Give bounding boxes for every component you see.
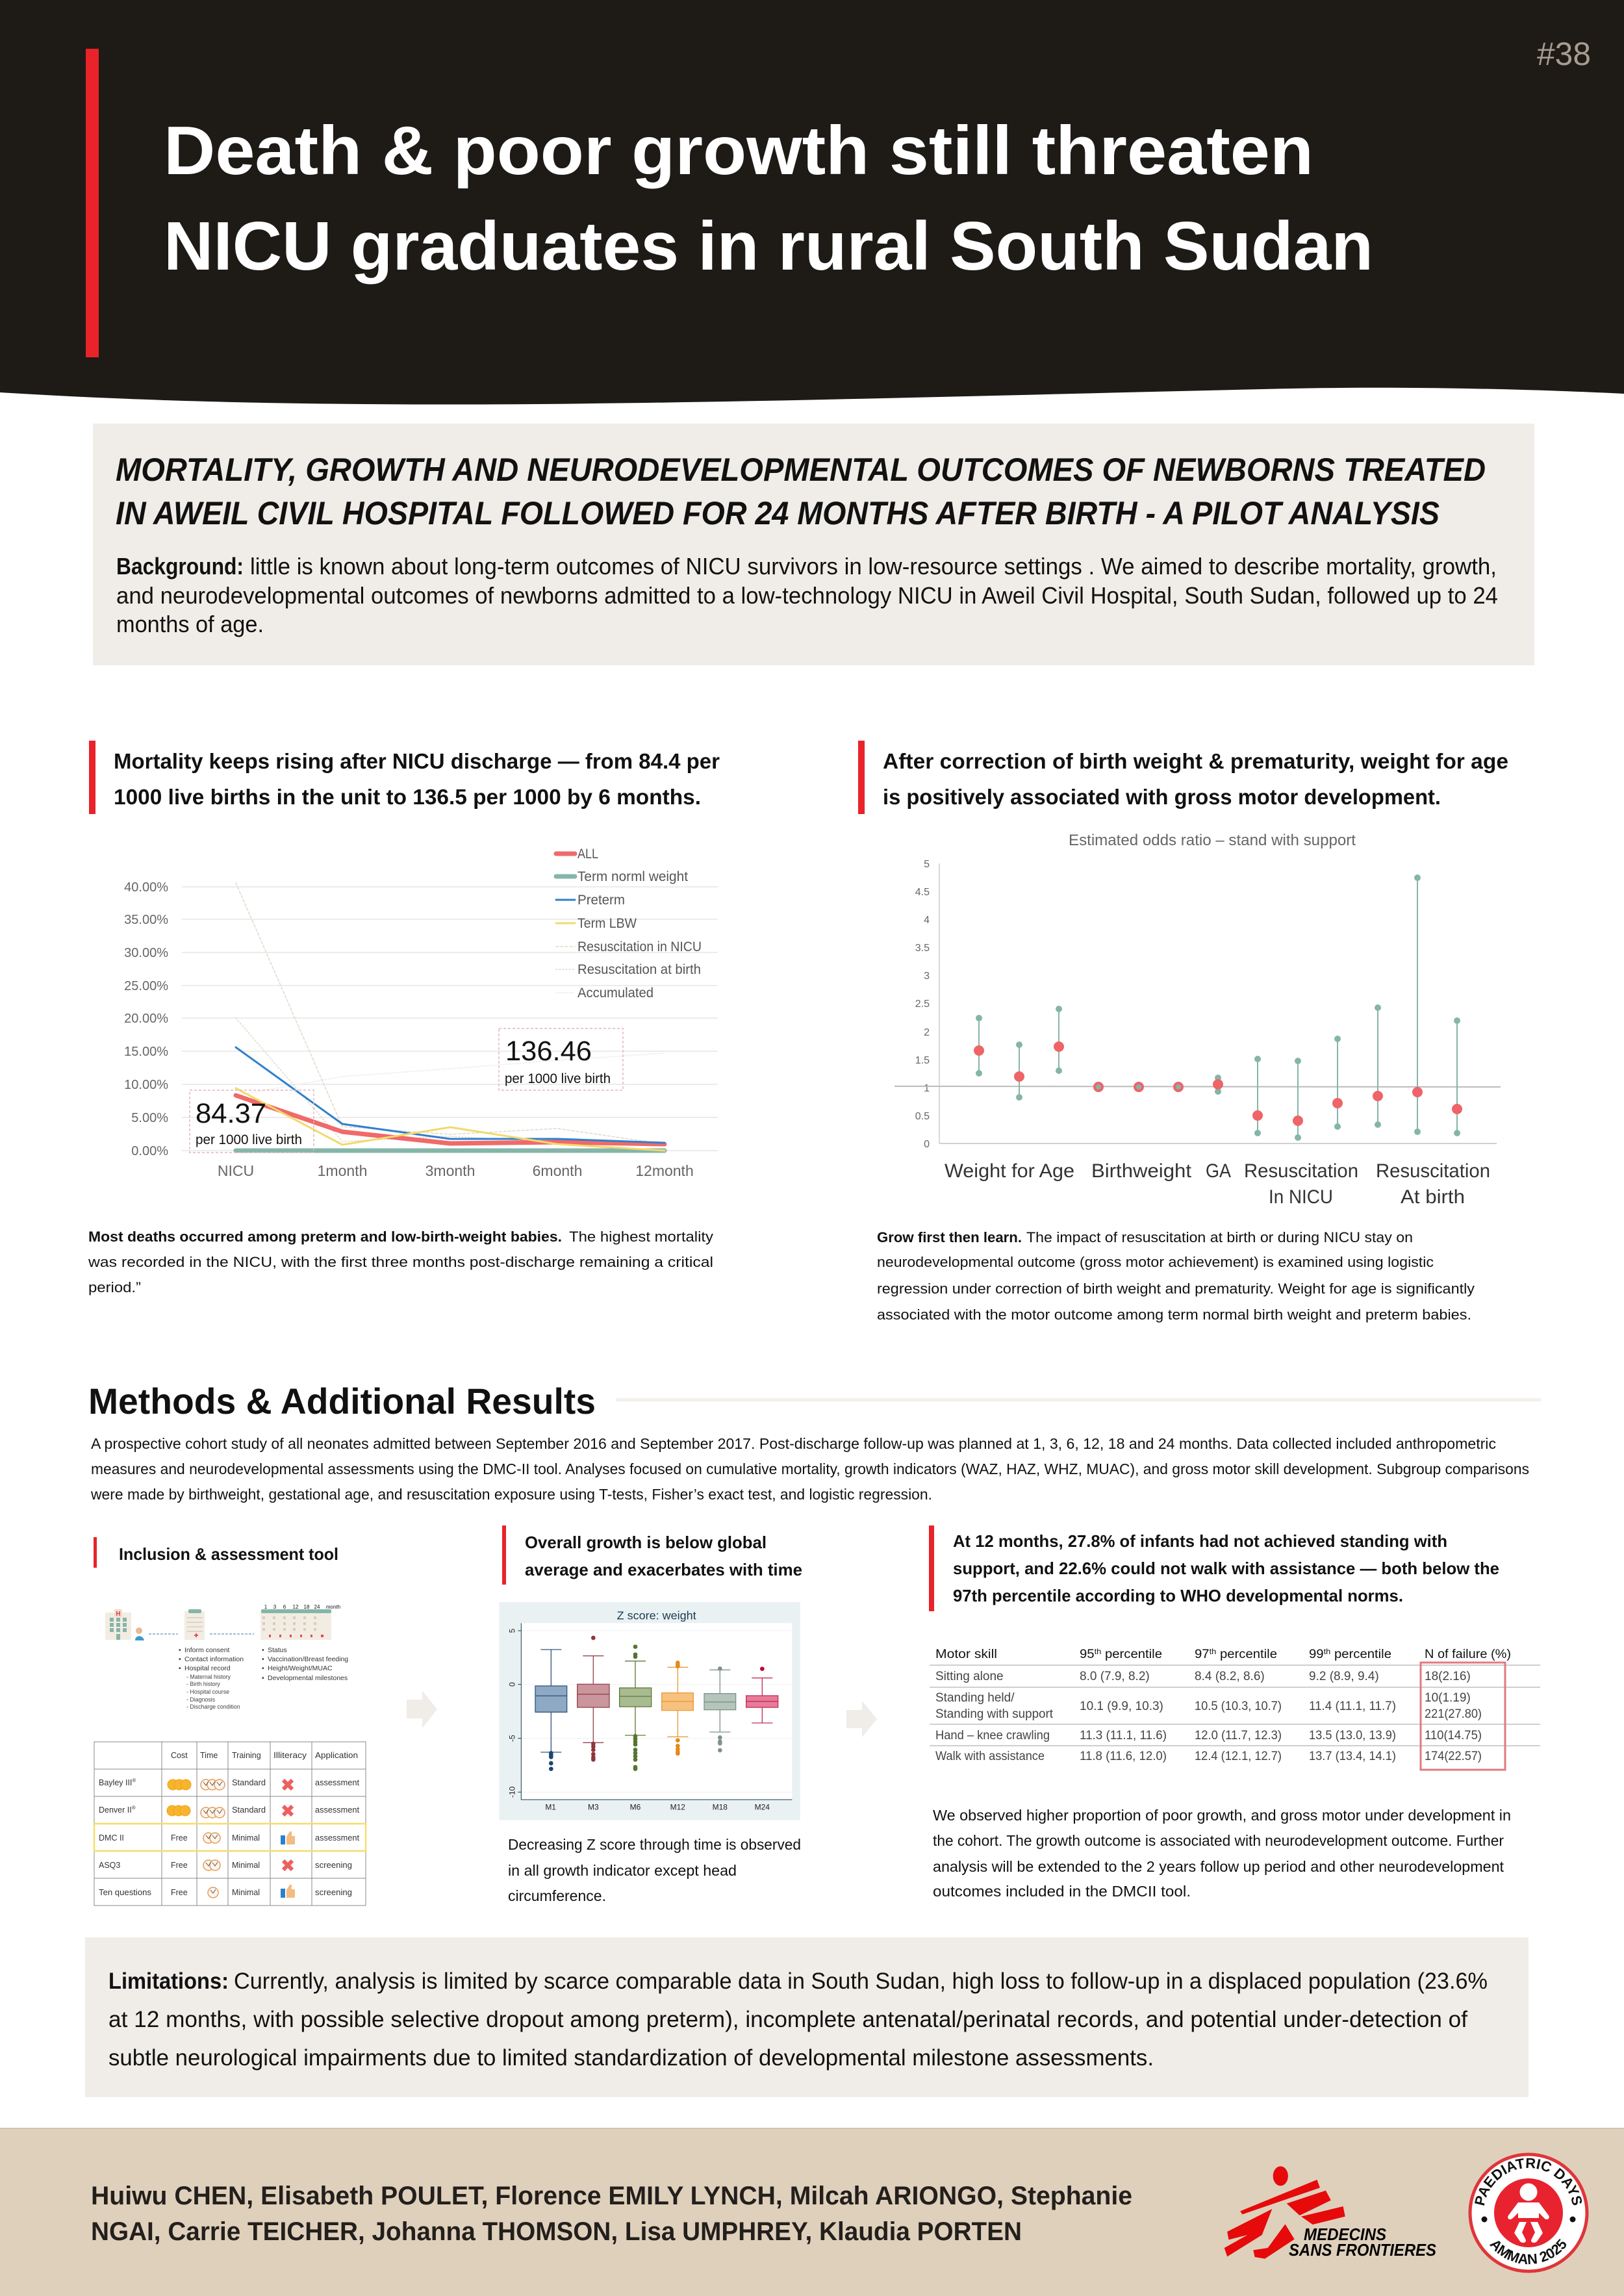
list: follow-up data: Vaccination/Breast feeding bbox=[268, 1655, 348, 1663]
box: M12 bbox=[662, 1661, 693, 1755]
footer band bbox=[0, 2128, 1624, 2296]
chart: estimated odds ratio: 1 bbox=[924, 1083, 930, 1094]
list: enrolment data: - Discharge condition bbox=[186, 1703, 240, 1710]
list: follow-up data: Developmental milestones bbox=[268, 1674, 348, 1682]
study title: IN AWEIL CIVIL HOSPITAL FOLLOWED FOR 24 MONTHS AFTER BIRTH - A PILOT ANALYSIS bbox=[116, 495, 1440, 531]
table: motor skill percentiles: Standing with support bbox=[935, 1707, 1054, 1721]
table: motor skill percentiles: percentile bbox=[1330, 1648, 1391, 1661]
table: motor skill percentiles: 8.4 (8.2, 8.6) bbox=[1195, 1670, 1265, 1683]
panel: limitations bbox=[85, 1937, 1529, 2097]
heading: overall growth: average and exacerbates with time bbox=[525, 1560, 802, 1579]
chart: estimated odds ratio: GA bbox=[1206, 1160, 1231, 1182]
text: conclusion: analysis will be extended to the 2 years follow up period and other neurodevelopment bbox=[933, 1858, 1504, 1875]
callout: failure column highlight bbox=[1421, 1663, 1505, 1770]
chart: estimated odds ratio: 4 bbox=[924, 915, 930, 926]
chart: estimated odds ratio: 3.5 bbox=[915, 943, 930, 954]
list: follow-up data: • bbox=[262, 1674, 264, 1682]
legend bbox=[556, 847, 702, 1001]
icon: follow-up calendar bbox=[260, 1604, 340, 1640]
legend: Accumulated bbox=[577, 986, 653, 1001]
table: assessment tools comparison: Denver II bbox=[99, 1805, 132, 1815]
table: assessment tools comparison: Standard bbox=[232, 1805, 266, 1815]
background text: months of age. bbox=[116, 611, 264, 637]
table: motor skill percentiles: 9.2 (8.9, 9.4) bbox=[1309, 1670, 1379, 1683]
text: grow first then learn: Grow first then learn. bbox=[877, 1229, 1022, 1245]
legend: Term norml weight bbox=[577, 869, 688, 884]
table: assessment tools comparison: assessment bbox=[315, 1833, 360, 1843]
table: assessment tools comparison: DMC II bbox=[99, 1833, 124, 1843]
line chart: mortality: 25.00% bbox=[124, 979, 168, 993]
list: follow-up data: Height/Weight/MUAC bbox=[268, 1665, 333, 1672]
list: follow-up data: Status bbox=[268, 1646, 287, 1654]
table: assessment tools comparison: Free bbox=[171, 1888, 188, 1897]
icon: clipboard bbox=[184, 1609, 205, 1640]
flow diagram: follow-up bbox=[105, 1604, 348, 1710]
heading: methods and additional results bbox=[88, 1381, 1541, 1422]
table: assessment tools comparison: screening bbox=[315, 1861, 352, 1870]
text: conclusion: the cohort. The growth outcome is associated with neurodevelopment outcome. Further bbox=[933, 1832, 1504, 1849]
text: grow first then learn: The impact of resuscitation at birth or during NICU stay on bbox=[1026, 1229, 1413, 1245]
box plot: Z score weight: M1 bbox=[545, 1802, 556, 1811]
text: growth finding: circumference. bbox=[508, 1887, 606, 1904]
line chart: mortality: 1month bbox=[318, 1162, 367, 1179]
text: mortality findings: was recorded in the NICU, with the first three months post-discharge remaining a critical bbox=[88, 1254, 713, 1270]
line chart: mortality: 15.00% bbox=[124, 1045, 168, 1059]
text: methods: were made by birthweight, gestational age, and resuscitation exposure using T-tests, Fisher’s exact test, and logistic regression. bbox=[90, 1486, 932, 1503]
callout: 136.46: 136.46 bbox=[505, 1036, 592, 1067]
text: methods: A prospective cohort study of all neonates admitted between September 2016 and September 2017. Post-discharge follow-up was planned at 1, 3, 6, 12, 18 and 24 months. Data collected included anthropometric bbox=[91, 1435, 1496, 1452]
line chart: mortality bbox=[124, 847, 718, 1179]
table: assessment tools comparison bbox=[94, 1742, 366, 1906]
text: grow first then learn: neurodevelopmental outcome (gross motor achievement) is examined using logistic bbox=[877, 1254, 1434, 1270]
chart: estimated odds ratio: 0 bbox=[924, 1139, 930, 1150]
callout: 136.46: per 1000 live birth bbox=[505, 1071, 611, 1086]
chart: estimated odds ratio: 2 bbox=[924, 1027, 930, 1038]
heading: mortality: Mortality keeps rising after NICU discharge — from 84.4 per bbox=[114, 749, 720, 773]
callout: 84.37 bbox=[190, 1090, 314, 1153]
arrow: to motor outcomes bbox=[846, 1701, 877, 1737]
table: motor skill percentiles: 221(27.80) bbox=[1425, 1707, 1482, 1721]
table: motor skill percentiles: 10.1 (9.9, 10.3) bbox=[1080, 1700, 1163, 1713]
chart: estimated odds ratio: 4.5 bbox=[915, 887, 930, 898]
icon: clocks bbox=[201, 1779, 225, 1898]
table: assessment tools comparison: Minimal bbox=[232, 1861, 260, 1870]
table: motor skill percentiles: th bbox=[1324, 1647, 1330, 1656]
text: grow first then learn: regression under correction of birth weight and prematurity. Weight for age is significantly bbox=[877, 1281, 1475, 1297]
box: M3 bbox=[577, 1636, 609, 1762]
list: enrolment data: Inform consent bbox=[184, 1646, 230, 1654]
icon: follow-up calendar: 18 bbox=[304, 1604, 310, 1610]
table: assessment tools comparison: Ten questions bbox=[99, 1888, 151, 1897]
table: assessment tools comparison: assessment bbox=[315, 1778, 360, 1787]
line chart: mortality: NICU bbox=[218, 1162, 254, 1179]
arrow: to growth bbox=[407, 1690, 437, 1728]
table: motor skill percentiles: 10.5 (10.3, 10.7) bbox=[1195, 1700, 1282, 1713]
line chart: mortality: 40.00% bbox=[124, 880, 168, 895]
line chart: mortality: 10.00% bbox=[124, 1078, 168, 1092]
text: mortality findings: period.” bbox=[88, 1279, 141, 1295]
panel: limitations: subtle neurological impairments due to limited standardization of developmental milestone assessments. bbox=[108, 2045, 1154, 2071]
line chart: mortality: 6month bbox=[533, 1162, 582, 1179]
list: follow-up data: • bbox=[262, 1665, 264, 1672]
table: motor skill percentiles: 97 bbox=[1195, 1648, 1208, 1661]
line chart: mortality: 0.00% bbox=[131, 1144, 168, 1158]
chart: estimated odds ratio: In NICU bbox=[1269, 1186, 1333, 1208]
table: assessment tools comparison: ® bbox=[132, 1778, 136, 1783]
text: mortality findings bbox=[88, 1229, 713, 1295]
heading: motor milestones: support, and 22.6% could not walk with assistance — both below the bbox=[953, 1559, 1499, 1578]
heading: overall growth: Overall growth is below global bbox=[525, 1533, 767, 1552]
text: methods bbox=[90, 1435, 1529, 1503]
title: Death & poor growth still threaten bbox=[164, 112, 1313, 189]
heading: weight for age: After correction of birth weight & prematurity, weight for age bbox=[883, 749, 1508, 773]
panel: limitations: Currently, analysis is limited by scarce comparable data in South Sudan, high loss to follow-up in a displaced population (23.6% bbox=[234, 1969, 1488, 1994]
table: motor skill percentiles: 99 bbox=[1309, 1648, 1323, 1661]
icon: follow-up calendar: 1 bbox=[264, 1604, 268, 1610]
box plot: Z score weight: 0 bbox=[508, 1682, 517, 1687]
poster number: #38 bbox=[1537, 36, 1591, 72]
logo: Paediatric Days bbox=[1468, 2153, 1589, 2273]
icon: hospital bbox=[105, 1609, 131, 1640]
study title bbox=[116, 452, 1486, 531]
list: enrolment data: - Birth history bbox=[186, 1681, 220, 1687]
list: follow-up data: • bbox=[262, 1655, 264, 1663]
logo: Paediatric Days: PAEDIATRIC DAYS bbox=[1475, 2158, 1582, 2206]
icon: follow-up calendar: 6 bbox=[283, 1604, 286, 1610]
icon: follow-up calendar: 24 bbox=[314, 1604, 320, 1610]
logo: Medecins Sans Frontieres bbox=[1224, 2166, 1437, 2260]
panel: study title and background bbox=[93, 424, 1534, 665]
chart: estimated odds ratio: Resuscitation bbox=[1244, 1160, 1358, 1182]
table: assessment tools comparison: ® bbox=[132, 1805, 136, 1811]
list: enrolment data bbox=[179, 1646, 244, 1710]
table: assessment tools comparison: assessment bbox=[315, 1805, 360, 1815]
table: assessment tools comparison: ASQ3 bbox=[99, 1861, 120, 1870]
icon: coins bbox=[167, 1779, 191, 1816]
table: assessment tools comparison: Time bbox=[200, 1751, 218, 1760]
list: enrolment data: - Hospital course bbox=[186, 1689, 229, 1695]
table: motor skill percentiles: 110(14.75) bbox=[1425, 1729, 1482, 1742]
title bbox=[164, 112, 1373, 285]
table: motor skill percentiles: 11.4 (11.1, 11.7) bbox=[1309, 1700, 1396, 1713]
box plot: Z score weight: Z score: weight bbox=[617, 1609, 696, 1622]
text: methods: measures and neurodevelopmental assessments using the DMC-II tool. Analyses focused on cumulative mortality, growth indicators (WAZ, HAZ, WHZ, MUAC), and gross motor skill development. Subgroup comparisons bbox=[91, 1461, 1529, 1477]
heading: mortality bbox=[89, 741, 720, 814]
table: motor skill percentiles: percentile bbox=[1101, 1648, 1162, 1661]
box plot: Z score weight: -10 bbox=[508, 1786, 517, 1798]
line chart: mortality: 3month bbox=[425, 1162, 475, 1179]
table: motor skill percentiles: 10(1.19) bbox=[1425, 1691, 1471, 1705]
table: motor skill percentiles: 11.8 (11.6, 12.0) bbox=[1080, 1750, 1167, 1763]
arrow: to follow-up bbox=[210, 1633, 254, 1635]
icon: thumbs up bbox=[281, 1831, 295, 1898]
table: motor skill percentiles: 95 bbox=[1080, 1648, 1093, 1661]
text: growth finding: Decreasing Z score through time is observed bbox=[508, 1836, 801, 1853]
text: growth finding: in all growth indicator except head bbox=[508, 1862, 737, 1879]
heading: motor milestones: 97th percentile according to WHO developmental norms. bbox=[953, 1586, 1403, 1605]
table: assessment tools comparison: Training bbox=[232, 1751, 261, 1760]
logo: Medecins Sans Frontieres: MEDECINS bbox=[1304, 2225, 1387, 2244]
chart: estimated odds ratio: Birthweight bbox=[1091, 1160, 1192, 1182]
table: motor skill percentiles: 12.4 (12.1, 12.7) bbox=[1195, 1750, 1282, 1763]
background text: Background: bbox=[116, 553, 244, 580]
list: enrolment data: • bbox=[179, 1665, 181, 1672]
table: motor skill percentiles: Hand – knee crawling bbox=[935, 1729, 1050, 1742]
table: motor skill percentiles: Motor skill bbox=[935, 1648, 997, 1661]
box plot: Z score weight: 5 bbox=[508, 1628, 517, 1633]
heading: inclusion and assessment tool bbox=[94, 1537, 338, 1568]
line chart: mortality: 20.00% bbox=[124, 1012, 168, 1026]
callout: 84.37: per 1000 live birth bbox=[196, 1132, 302, 1147]
heading: motor milestones bbox=[929, 1525, 1499, 1611]
box plot: Z score weight: -5 bbox=[508, 1735, 517, 1742]
header banner bbox=[0, 0, 1624, 405]
table: assessment tools comparison: Illiteracy bbox=[273, 1751, 307, 1760]
heading: weight for age: is positively associated with gross motor development. bbox=[883, 785, 1441, 809]
text: grow first then learn bbox=[877, 1229, 1475, 1323]
table: motor skill percentiles: th bbox=[1095, 1647, 1101, 1656]
icon: hospital: H bbox=[116, 1611, 121, 1618]
text: mortality findings: Most deaths occurred among preterm and low-birth-weight babies. bbox=[88, 1229, 562, 1245]
heading: motor milestones: At 12 months, 27.8% of infants had not achieved standing with bbox=[953, 1531, 1447, 1551]
table: motor skill percentiles: 8.0 (7.9, 8.2) bbox=[1080, 1670, 1150, 1683]
chart: estimated odds ratio: Weight for Age bbox=[945, 1160, 1074, 1182]
legend: Resuscitation in NICU bbox=[577, 939, 702, 954]
text: grow first then learn: associated with the motor outcome among term normal birth weight and preterm babies. bbox=[877, 1307, 1471, 1323]
table: motor skill percentiles: N of failure (%) bbox=[1425, 1648, 1511, 1661]
accent bar bbox=[86, 49, 99, 357]
chart: estimated odds ratio: At birth bbox=[1401, 1186, 1465, 1208]
table: motor skill percentiles: percentile bbox=[1216, 1648, 1277, 1661]
table: assessment tools comparison: Free bbox=[171, 1833, 188, 1843]
table: motor skill percentiles: 13.5 (13.0, 13.9) bbox=[1309, 1729, 1396, 1742]
line chart: mortality: 5.00% bbox=[131, 1111, 168, 1125]
icon: follow-up calendar: month bbox=[326, 1604, 340, 1610]
callout: 84.37: 84.37 bbox=[196, 1098, 266, 1129]
background text: and neurodevelopmental outcomes of newborns admitted to a low-technology NICU in Aweil Civil Hospital, South Sudan, followed up to 24 bbox=[116, 582, 1498, 609]
chart: estimated odds ratio: 2.5 bbox=[915, 999, 930, 1010]
table: assessment tools comparison: Free bbox=[171, 1861, 188, 1870]
logo: Paediatric Days: AMMAN 2025 bbox=[1489, 2239, 1566, 2265]
table: motor skill percentiles: 13.7 (13.4, 14.1) bbox=[1309, 1750, 1396, 1763]
legend: Preterm bbox=[577, 893, 625, 908]
table: assessment tools comparison: Cost bbox=[171, 1751, 188, 1760]
icon: follow-up calendar: 12 bbox=[293, 1604, 299, 1610]
chart: estimated odds ratio: Estimated odds ratio – stand with support bbox=[1069, 832, 1356, 849]
panel: limitations: at 12 months, with possible selective dropout among preterm), incomplete antenatal/perinatal records, and potential under-detection of bbox=[108, 2007, 1467, 2032]
legend: Term LBW bbox=[577, 916, 637, 931]
text: mortality findings: The highest mortality bbox=[569, 1229, 713, 1245]
table: motor skill percentiles: Standing held/ bbox=[935, 1691, 1015, 1705]
heading: methods and additional results: Methods & Additional Results bbox=[88, 1381, 596, 1422]
authors: Huiwu CHEN, Elisabeth POULET, Florence EMILY LYNCH, Milcah ARIONGO, Stephanie bbox=[91, 2182, 1132, 2210]
table: motor skill percentiles: 11.3 (11.1, 11.6) bbox=[1080, 1729, 1167, 1742]
heading: overall growth bbox=[502, 1525, 802, 1585]
list: follow-up data: • bbox=[262, 1646, 264, 1654]
chart: estimated odds ratio: Resuscitation bbox=[1376, 1160, 1490, 1182]
text: growth finding bbox=[508, 1836, 801, 1904]
table: motor skill percentiles: 174(22.57) bbox=[1425, 1750, 1482, 1763]
box plot: Z score weight: M12 bbox=[670, 1802, 685, 1811]
table: motor skill percentiles: 18(2.16) bbox=[1425, 1670, 1471, 1683]
study title: MORTALITY, GROWTH AND NEURODEVELOPMENTAL OUTCOMES OF NEWBORNS TREATED bbox=[116, 452, 1486, 488]
line chart: mortality: 12month bbox=[635, 1162, 694, 1179]
list: enrolment data: • bbox=[179, 1655, 181, 1663]
box: M24 bbox=[746, 1666, 778, 1723]
box plot: Z score weight: M18 bbox=[713, 1802, 728, 1811]
box plot: Z score weight bbox=[499, 1602, 800, 1820]
box plot: Z score weight: M6 bbox=[630, 1802, 641, 1811]
chart: estimated odds ratio: 0.5 bbox=[915, 1111, 930, 1122]
panel: limitations: Limitations: bbox=[108, 1969, 229, 1994]
authors: NGAI, Carrie TEICHER, Johanna THOMSON, Lisa UMPHREY, Klaudia PORTEN bbox=[91, 2217, 1022, 2246]
callout: 136.46 bbox=[499, 1028, 623, 1090]
icon: follow-up calendar: 3 bbox=[273, 1604, 277, 1610]
table: motor skill percentiles: Sitting alone bbox=[935, 1670, 1004, 1683]
table: assessment tools comparison: Minimal bbox=[232, 1888, 260, 1897]
table: motor skill percentiles: th bbox=[1210, 1647, 1216, 1656]
legend: Resuscitation at birth bbox=[577, 962, 701, 977]
icon: nurse bbox=[135, 1627, 144, 1640]
table: assessment tools comparison: Application bbox=[315, 1751, 358, 1760]
line chart: mortality: 30.00% bbox=[124, 946, 168, 960]
chart: estimated odds ratio bbox=[894, 832, 1501, 1208]
logo: Medecins Sans Frontieres: SANS FRONTIERES bbox=[1289, 2240, 1437, 2260]
list: enrolment data: - Diagnosis bbox=[186, 1696, 216, 1703]
box plot: Z score weight: M24 bbox=[755, 1802, 770, 1811]
table: motor skill percentiles: 12.0 (11.7, 12.3) bbox=[1195, 1729, 1282, 1742]
icon: red crosses bbox=[283, 1780, 292, 1870]
box: M1 bbox=[535, 1650, 567, 1771]
background text: little is known about long-term outcomes of NICU survivors in low-resource settings . We aimed to describe mortality, growth, bbox=[250, 553, 1497, 580]
text: conclusion: We observed higher proportion of poor growth, and gross motor under development in bbox=[933, 1807, 1511, 1824]
list: follow-up data bbox=[262, 1646, 348, 1682]
list: enrolment data: • bbox=[179, 1646, 181, 1654]
chart: estimated odds ratio: 1.5 bbox=[915, 1055, 930, 1066]
box plot: Z score weight: M3 bbox=[588, 1802, 599, 1811]
table: assessment tools comparison: Bayley III bbox=[99, 1778, 132, 1787]
table: motor skill percentiles bbox=[930, 1647, 1540, 1770]
heading: weight for age bbox=[858, 741, 1508, 814]
list: enrolment data: Hospital record bbox=[184, 1665, 231, 1672]
table: assessment tools comparison: Standard bbox=[232, 1778, 266, 1787]
arrow: to enrolment bbox=[149, 1633, 178, 1635]
authors bbox=[91, 2182, 1132, 2246]
legend: ALL bbox=[577, 847, 598, 861]
table: assessment tools comparison: Minimal bbox=[232, 1833, 260, 1843]
list: enrolment data: - Maternal history bbox=[186, 1674, 231, 1680]
line chart: mortality: 35.00% bbox=[124, 913, 168, 927]
text: conclusion bbox=[933, 1807, 1511, 1900]
background text bbox=[116, 553, 1498, 637]
chart: estimated odds ratio: 3 bbox=[924, 971, 930, 982]
table: motor skill percentiles: Walk with assistance bbox=[935, 1750, 1045, 1763]
heading: mortality: 1000 live births in the unit to 136.5 per 1000 by 6 months. bbox=[114, 785, 701, 809]
text: conclusion: outcomes included in the DMCII tool. bbox=[933, 1883, 1191, 1900]
box: M18 bbox=[704, 1666, 736, 1752]
title: NICU graduates in rural South Sudan bbox=[164, 208, 1373, 285]
chart: estimated odds ratio: 5 bbox=[924, 859, 930, 870]
heading: inclusion and assessment tool: Inclusion & assessment tool bbox=[119, 1544, 338, 1564]
table: assessment tools comparison: screening bbox=[315, 1888, 352, 1897]
box: M6 bbox=[620, 1644, 652, 1771]
list: enrolment data: Contact information bbox=[184, 1655, 244, 1663]
